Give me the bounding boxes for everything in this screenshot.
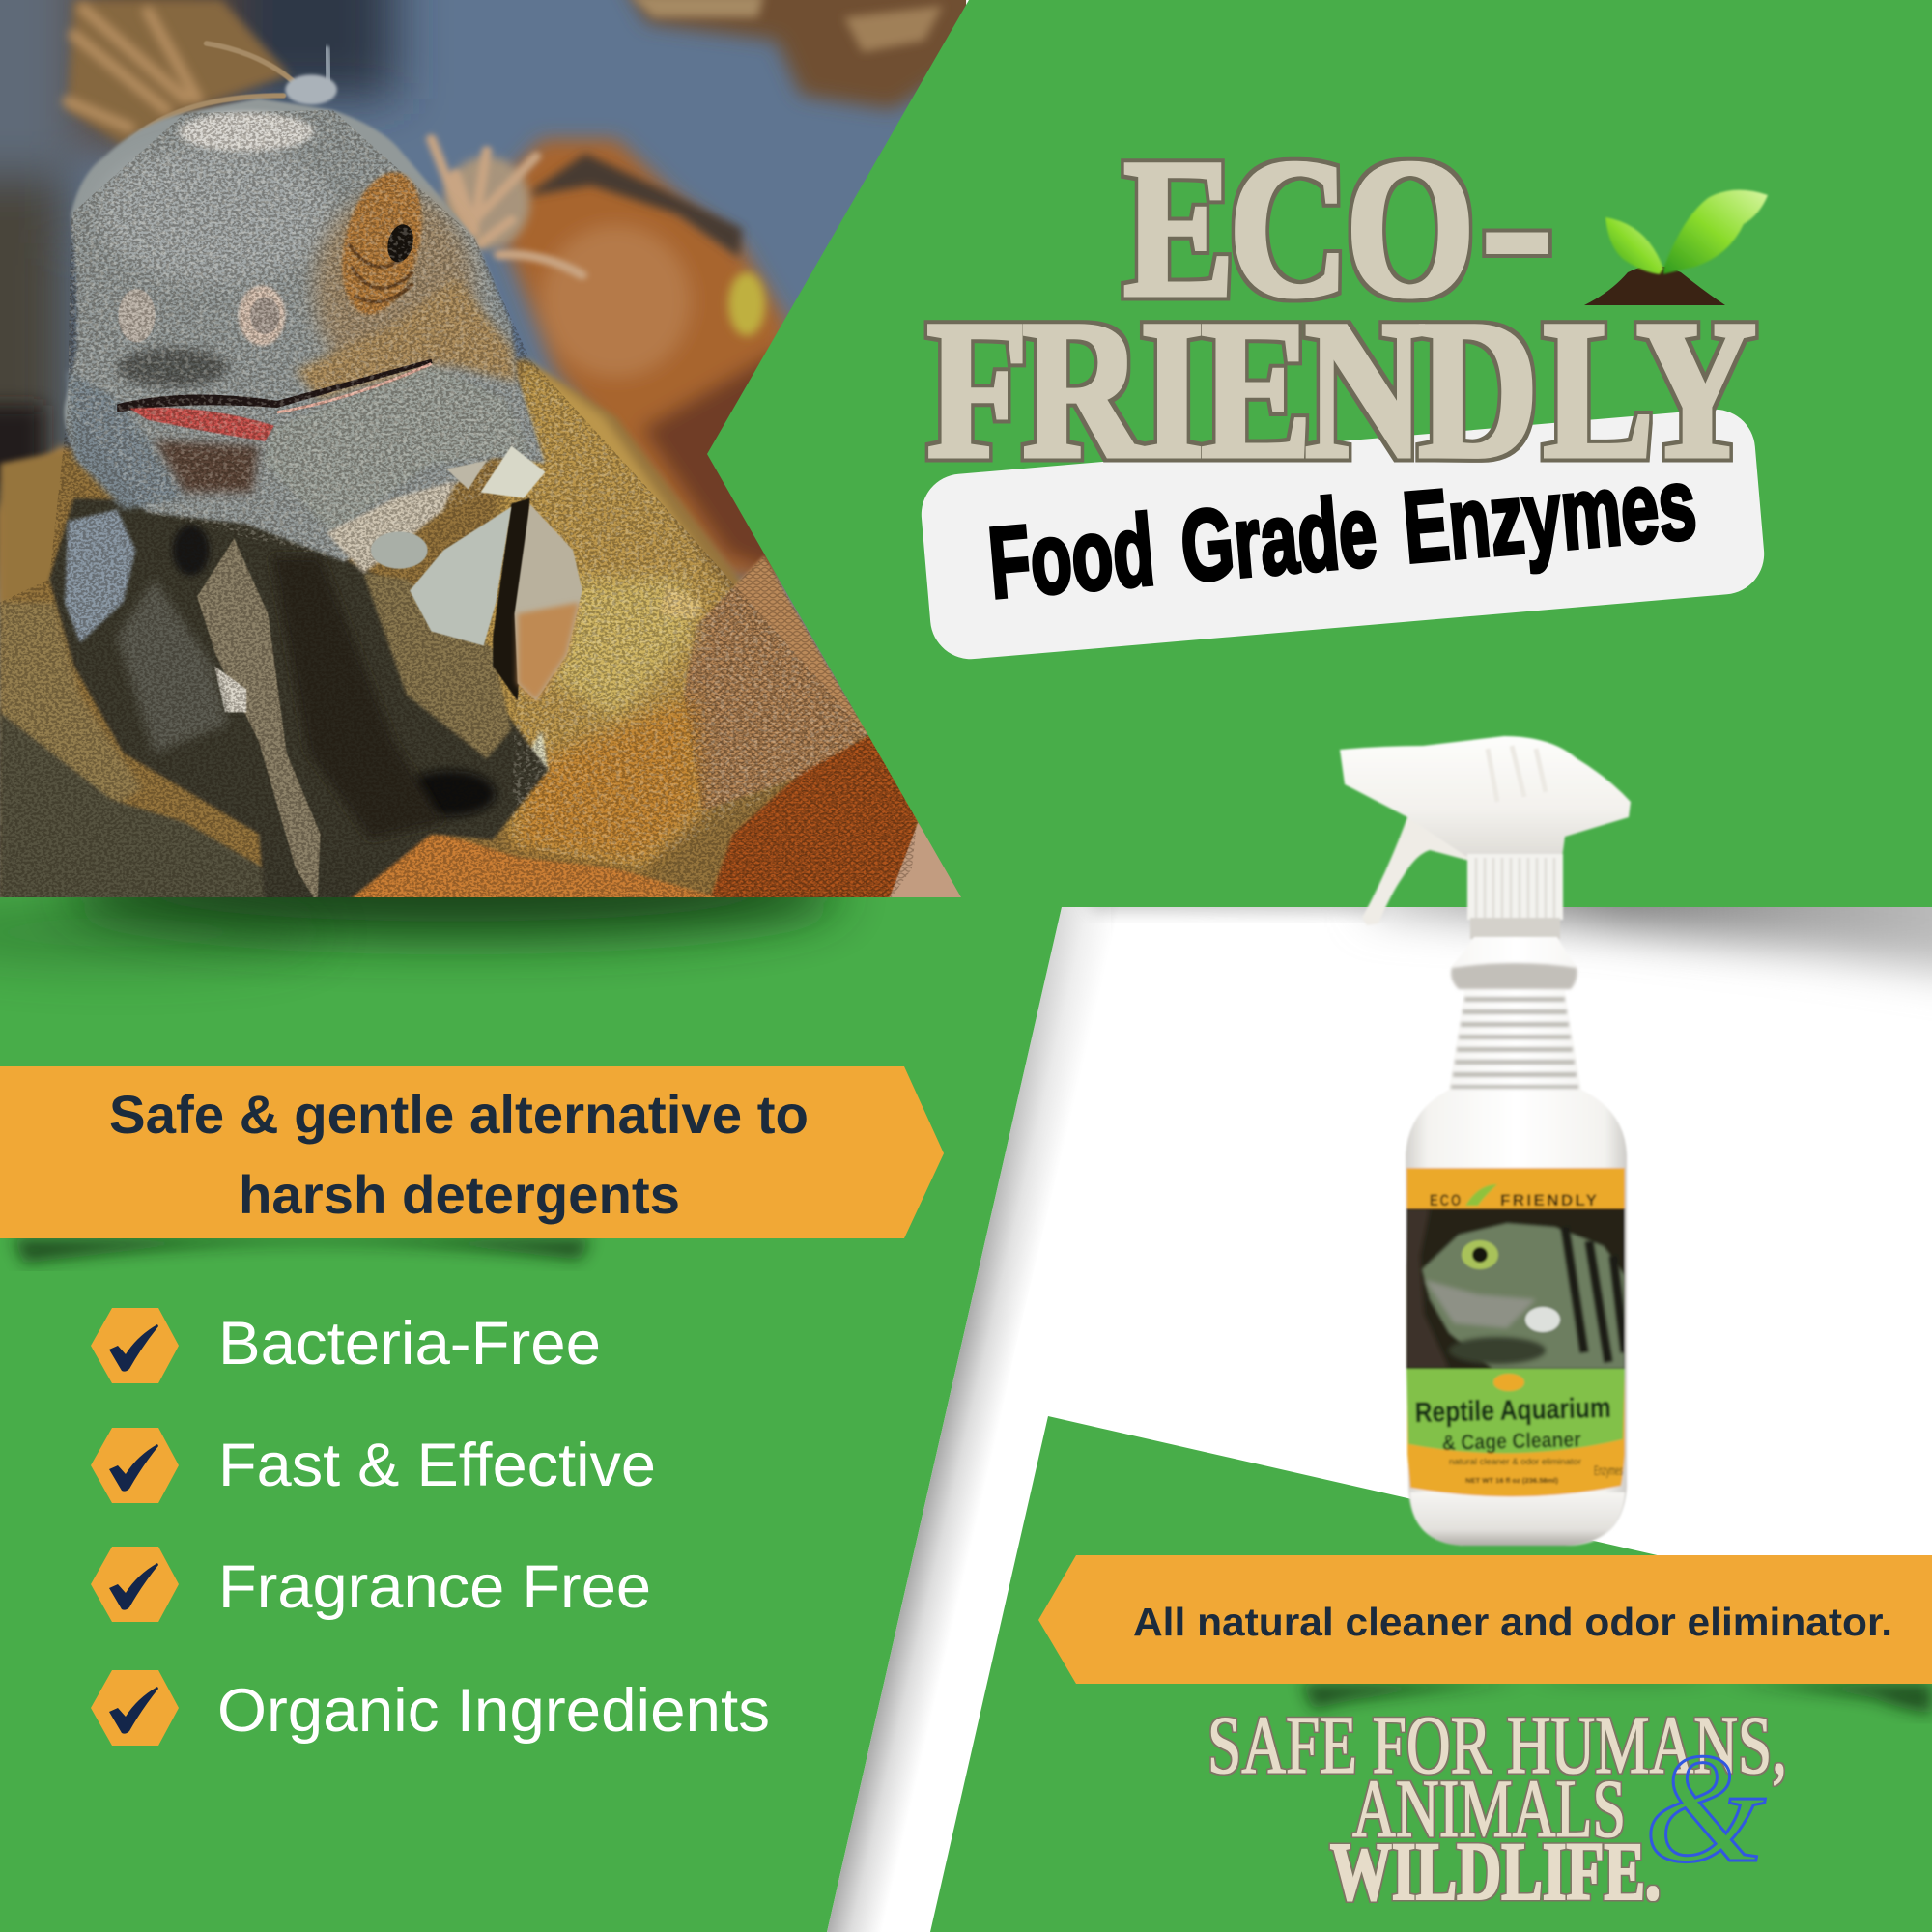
dewlap xyxy=(49,498,549,903)
title: ECO-FRIENDLY: - xyxy=(1481,113,1553,333)
panel: left green xyxy=(0,897,1062,1932)
tagline: Safe for humans, animals & wildlife: ANIMALS xyxy=(1352,1762,1626,1855)
benefit: Fragrance Free xyxy=(91,1547,651,1622)
crest spines xyxy=(68,9,582,275)
bottle label: Reptile Aquarium xyxy=(1414,1393,1611,1429)
product: spray bottle xyxy=(1340,736,1631,1546)
bottle base shadow xyxy=(1410,1492,1625,1546)
tagline: Safe for humans, animals & wildlife: WILDLIFE. xyxy=(1330,1825,1661,1918)
title: ECO-FRIENDLY xyxy=(926,113,1756,499)
title: ECO-FRIENDLY: FRIENDLY xyxy=(926,281,1756,499)
bottle label xyxy=(1406,1168,1625,1497)
label photo: iguana xyxy=(1406,1208,1625,1369)
title: ECO-FRIENDLY: ECO xyxy=(1123,120,1475,338)
bottle shoulder and body xyxy=(1406,937,1627,1546)
bottle ring band xyxy=(1451,963,1577,989)
banner: All natural cleaner xyxy=(1038,1555,1932,1684)
benefit: Fast & Effective: Fast & Effective xyxy=(218,1432,656,1499)
banner: All natural cleaner: All natural cleaner and odor eliminator. xyxy=(1133,1600,1892,1644)
label logo text: ECO xyxy=(1430,1191,1463,1209)
bottle trigger head xyxy=(1340,736,1631,925)
bottle label: FRIENDLY xyxy=(1500,1191,1598,1209)
benefit: Fragrance Free: Fragrance Free xyxy=(218,1553,651,1621)
benefit: Bacteria-Free xyxy=(91,1308,601,1383)
banner: Safe & gentle alternative: Safe & gentle alternative to xyxy=(109,1084,809,1145)
shadows on white panel xyxy=(821,831,1932,1932)
benefit: Bacteria-Free: Bacteria-Free xyxy=(218,1310,601,1378)
benefit: Organic Ingredients: Organic Ingredients xyxy=(217,1677,770,1745)
icon: sprout xyxy=(1584,190,1768,305)
heading pill: Food Grade Enzymes xyxy=(918,406,1768,663)
banner shadow: left xyxy=(13,1238,591,1264)
bottle neck ribs xyxy=(1451,997,1578,1089)
label green band xyxy=(1406,1369,1625,1453)
tagline: Safe for humans, animals & wildlife xyxy=(1208,1698,1787,1918)
bottle label: & Cage Cleaner xyxy=(1441,1427,1581,1455)
neck plates xyxy=(371,446,582,700)
panel: top right green with arrow point xyxy=(707,0,1932,907)
shadow under photo xyxy=(0,897,858,982)
banner shadow: right xyxy=(1301,1681,1932,1714)
photo: iguana close-up xyxy=(0,0,1010,926)
panel: lower right green xyxy=(930,1416,1932,1932)
head xyxy=(65,99,545,574)
scale texture xyxy=(0,110,918,903)
banner: Safe & gentle alternative xyxy=(0,1066,944,1238)
bottle collar xyxy=(1467,854,1563,939)
banner: Safe & gentle alternative: harsh detergents xyxy=(239,1164,680,1225)
photo background xyxy=(0,0,1010,897)
bottle label: natural cleaner & odor eliminator xyxy=(1449,1457,1581,1466)
ampersand: & xyxy=(1644,1722,1766,1895)
benefit: Fast & Effective xyxy=(91,1428,656,1503)
bottle label: NET WT 16 fl oz (236.58ml) xyxy=(1465,1478,1558,1485)
bottle label: Enzymes xyxy=(1594,1463,1623,1478)
body underlay and limbs xyxy=(0,359,985,926)
